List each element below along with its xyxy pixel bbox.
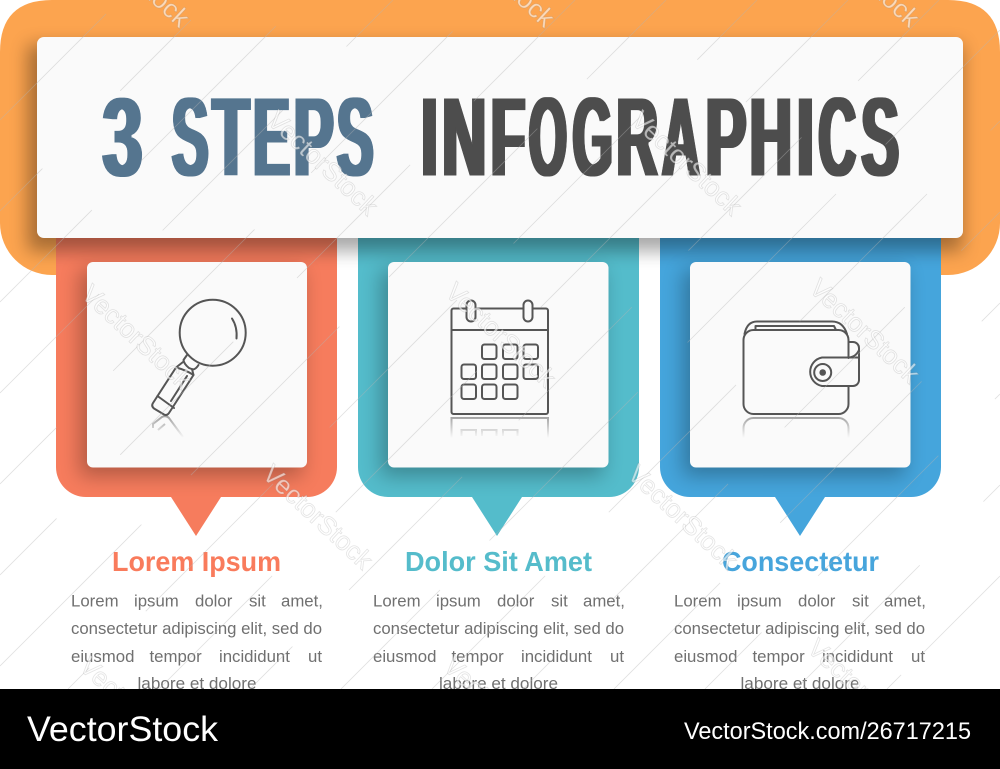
body: step 3: sit xyxy=(852,592,869,610)
body: step 3: consectetur adipiscing elit, sed do xyxy=(674,619,925,638)
card: calendar xyxy=(388,262,608,468)
body: step 3 xyxy=(674,592,926,693)
body: step 3: amet, xyxy=(884,592,926,610)
icon: wallet xyxy=(744,322,859,414)
text block: step 2 xyxy=(373,546,625,693)
body: step 2: amet, xyxy=(583,592,625,610)
title: infographics: R xyxy=(616,74,658,200)
watermark overlay: VectorStock xyxy=(622,458,745,576)
title: infographics: G xyxy=(573,74,613,200)
body: step 1: amet, xyxy=(281,592,323,610)
icon: magnifying glass xyxy=(152,300,246,415)
title: infographics: H xyxy=(750,74,792,200)
body: step 3: tempor xyxy=(752,647,805,666)
body: step 3: Lorem xyxy=(674,592,722,610)
body: step 3: eiusmod xyxy=(674,647,737,666)
title: 3 steps: P xyxy=(294,74,334,200)
body: step 2: sit xyxy=(551,592,568,610)
body: step 1: incididunt xyxy=(219,647,290,666)
body: step 2: eiusmod xyxy=(373,647,436,666)
watermark overlay: VectorStock xyxy=(440,276,563,394)
title: 3 steps: S xyxy=(172,74,208,200)
body: step 2: tempor xyxy=(452,647,504,666)
watermark overlay: VectorStock xyxy=(626,104,749,222)
body: step 1: dolor xyxy=(195,592,233,610)
body: step 2: consectetur adipiscing elit, sed do xyxy=(373,619,624,638)
body: step 3: dolor xyxy=(798,592,836,610)
title: infographics: O xyxy=(529,74,567,200)
watermark overlay: VectorStock xyxy=(804,272,927,390)
heading: Lorem Ipsum: Lorem Ipsum xyxy=(112,546,281,577)
orange header backing xyxy=(0,0,1000,275)
title: infographics: I xyxy=(421,74,438,200)
body: step 2 xyxy=(373,592,625,693)
footer brand: VectorStock xyxy=(27,710,219,749)
body: step 3: ut xyxy=(911,647,925,666)
heading: Dolor Sit Amet: Dolor Sit Amet xyxy=(405,546,592,577)
body: step 3: ipsum xyxy=(737,592,782,610)
watermark overlay: VectorStock xyxy=(438,650,561,768)
body: step 1: eiusmod xyxy=(71,647,134,666)
body: step 2: labore et dolore xyxy=(439,674,558,693)
body: step 1: labore et dolore xyxy=(138,674,256,693)
header panel: S xyxy=(337,74,373,200)
title: infographics: F xyxy=(491,74,525,200)
title: 3 steps: T xyxy=(212,74,249,200)
heading: Consectetur: Consectetur xyxy=(722,546,879,577)
icon reflection: calendar xyxy=(452,418,548,438)
title: 3 steps: E xyxy=(253,74,290,200)
header panel xyxy=(37,37,963,238)
body: step 1: sit xyxy=(249,592,266,610)
body: step 1: consectetur adipiscing elit, sed do xyxy=(71,619,322,638)
body: step 3: labore et dolore xyxy=(740,674,860,693)
body: step 2: dolor xyxy=(497,592,535,610)
watermark overlay: VectorStock xyxy=(76,278,199,396)
title: infographics: N xyxy=(442,74,486,200)
body: step 2: incididunt xyxy=(521,647,592,666)
footer image id: VectorStock.com/26717215 xyxy=(684,718,971,745)
text block: step 1 xyxy=(71,546,323,693)
body: step 2: ipsum xyxy=(436,592,481,610)
body: step 2: Lorem xyxy=(373,592,421,610)
title: infographics: A xyxy=(662,74,700,200)
card: wallet xyxy=(690,262,910,468)
header shadow xyxy=(28,45,962,251)
icon: calendar xyxy=(452,300,548,414)
title: infographics: S xyxy=(861,74,899,200)
title: 3 steps: 3 xyxy=(102,74,142,200)
icon reflection: wallet xyxy=(744,418,848,438)
body: step 1: tempor xyxy=(150,647,202,666)
body: step 1: ut xyxy=(308,647,322,666)
body: step 3: incididunt xyxy=(822,647,893,666)
watermark overlay: VectorStock xyxy=(802,632,925,750)
footer bar xyxy=(0,689,1000,769)
pin: step 2 xyxy=(358,238,639,536)
pin: step 1 xyxy=(56,238,337,536)
watermark overlay: VectorStock xyxy=(262,104,385,222)
card: magnifier xyxy=(87,262,307,468)
watermark overlay: VectorStock xyxy=(257,458,380,576)
body: step 1: ipsum xyxy=(134,592,179,610)
body: step 2: ut xyxy=(610,647,624,666)
pin: step 3 xyxy=(660,238,941,536)
body: step 1: Lorem xyxy=(71,592,119,610)
watermark overlay: VectorStock xyxy=(74,650,197,768)
title: infographics: P xyxy=(706,74,746,200)
icon reflection: magnifier xyxy=(153,416,183,437)
title: infographics: I xyxy=(797,74,814,200)
text block: step 3 xyxy=(674,546,926,693)
body: step 1 xyxy=(71,592,323,693)
title: infographics: C xyxy=(819,74,856,200)
